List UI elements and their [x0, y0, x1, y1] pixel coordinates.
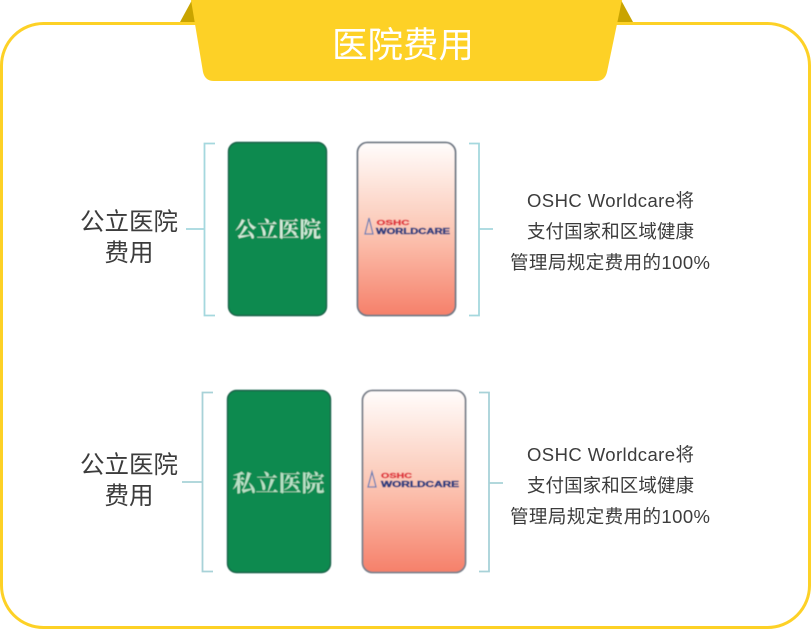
card: public hospital: 公立医院 — [235, 218, 321, 242]
logo: OSHC Worldcare — [365, 218, 451, 236]
text: coverage description: 支付国家和区域健康 — [527, 221, 694, 242]
panel: public hospital row — [80, 142, 710, 316]
text: coverage description: 管理局规定费用的100% — [510, 506, 710, 527]
right bracket — [479, 392, 503, 572]
banner: title ribbon — [191, 0, 622, 81]
logo: OSHC Worldcare: WORLDCARE — [376, 227, 451, 236]
left bracket — [182, 392, 213, 572]
card: private hospital: 私立医院 — [232, 471, 324, 496]
text: coverage description: 管理局规定费用的100% — [510, 252, 710, 273]
card: OSHC Worldcare — [358, 142, 456, 316]
title: 医院费用 — [332, 25, 474, 65]
logo: OSHC Worldcare: OSHC — [381, 473, 412, 480]
left bracket — [186, 144, 215, 316]
icon: right ribbon fold — [616, 0, 633, 22]
text: coverage description: OSHC Worldcare将 — [527, 444, 694, 465]
card: private hospital — [228, 390, 330, 572]
right bracket — [469, 144, 493, 316]
label: private hospital fees — [80, 451, 178, 510]
card: public hospital — [228, 142, 326, 316]
text: coverage description — [510, 190, 710, 273]
label: public hospital fees: 费用 — [104, 239, 154, 267]
logo: OSHC Worldcare: WORLDCARE — [381, 480, 460, 489]
logo: OSHC Worldcare: OSHC — [376, 218, 410, 227]
label: public hospital fees: 公立医院 — [80, 208, 178, 236]
panel: private hospital row — [80, 390, 710, 572]
card: OSHC Worldcare — [362, 390, 466, 572]
logo: OSHC Worldcare — [368, 472, 460, 489]
label: public hospital fees — [80, 208, 178, 267]
text: coverage description: 支付国家和区域健康 — [527, 475, 694, 496]
text: coverage description: OSHC Worldcare将 — [527, 190, 694, 211]
label: private hospital fees: 公立医院 — [80, 451, 178, 479]
label: private hospital fees: 费用 — [104, 482, 154, 510]
text: coverage description — [510, 444, 710, 527]
icon: left ribbon fold — [180, 0, 197, 22]
